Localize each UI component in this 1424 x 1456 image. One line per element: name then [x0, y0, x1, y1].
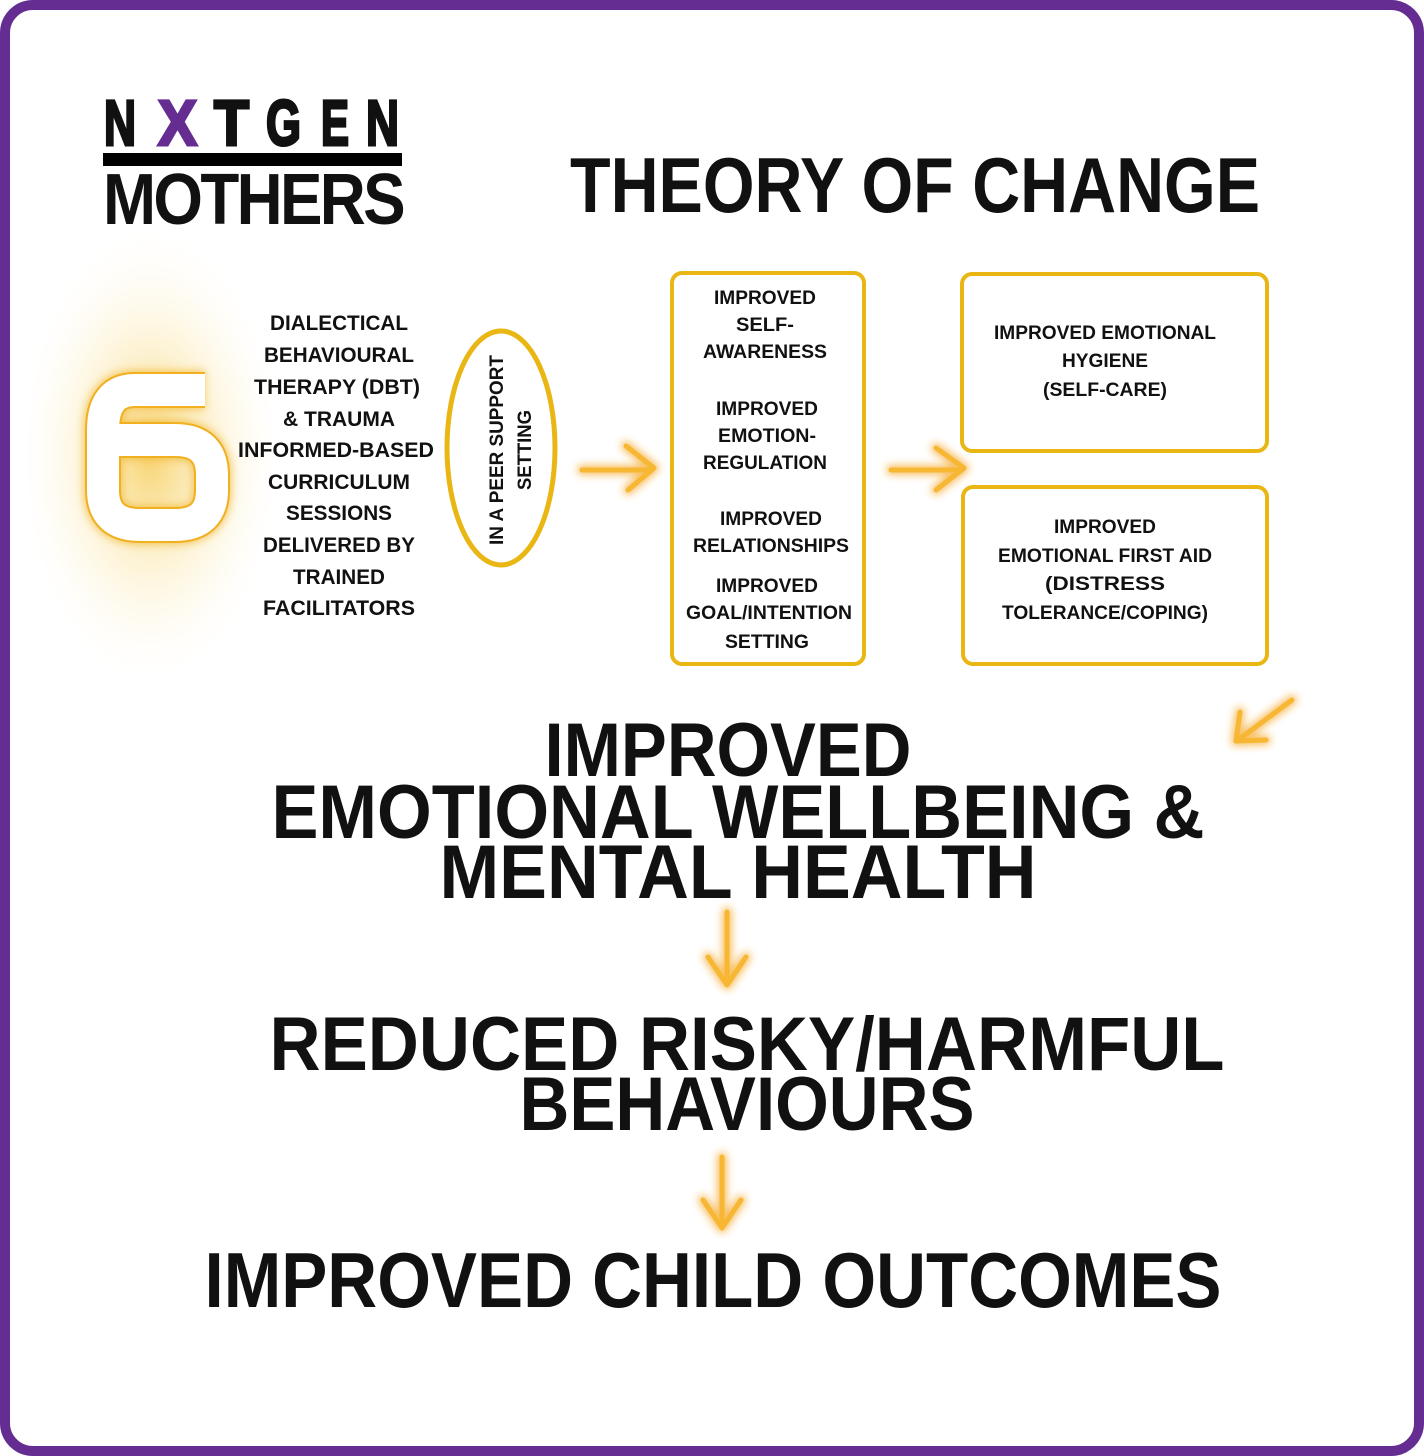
- heading: improved emotional wellbeing: EMOTIONAL WELLBEING &: [272, 770, 1204, 855]
- icon: glowing number 6: [20, 230, 280, 680]
- box: emotional first aid: EMOTIONAL FIRST AID: [998, 546, 1212, 567]
- ellipse: peer support setting: [447, 331, 555, 565]
- arrow: down 1: [708, 912, 746, 985]
- text block: intervention description: & TRAUMA: [283, 408, 395, 431]
- ellipse: peer support setting: IN A PEER SUPPORT: [487, 355, 508, 545]
- text block: intervention description: BEHAVIOURAL: [264, 344, 414, 367]
- ellipse: peer support setting: SETTING: [515, 410, 536, 490]
- box: short-term outcomes: [672, 273, 864, 664]
- box: emotional first aid: (DISTRESS: [1045, 574, 1165, 595]
- box: emotional first aid: IMPROVED: [1054, 517, 1156, 538]
- arrow: right 2: [891, 448, 964, 490]
- heading: improved emotional wellbeing: IMPROVED: [544, 708, 912, 793]
- arrow: diagonal down-left: [1236, 700, 1292, 741]
- logo: N: [366, 87, 399, 159]
- logo: T: [214, 87, 249, 159]
- heading: improved emotional wellbeing: MENTAL HEALTH: [440, 830, 1036, 915]
- box: emotional hygiene: [962, 274, 1267, 451]
- box: emotional hygiene: IMPROVED EMOTIONAL: [994, 323, 1216, 344]
- box: short-term outcomes: IMPROVED: [714, 288, 816, 309]
- text block: intervention description: DELIVERED BY: [263, 534, 415, 557]
- box: emotional first aid: [963, 487, 1267, 664]
- box: short-term outcomes: SETTING: [725, 632, 809, 653]
- heading: improved emotional wellbeing: [272, 708, 1204, 915]
- box: short-term outcomes: IMPROVED: [716, 399, 818, 420]
- logo: X: [158, 87, 197, 159]
- logo: N: [104, 87, 136, 159]
- box: emotional hygiene: (SELF-CARE): [1043, 380, 1167, 401]
- logo: [103, 87, 404, 240]
- box: short-term outcomes: GOAL/INTENTION: [686, 603, 852, 624]
- box: short-term outcomes: REGULATION: [703, 453, 827, 474]
- title: THEORY OF CHANGE: [570, 141, 1260, 229]
- arrow: right 1: [582, 446, 654, 490]
- text block: intervention description: CURRICULUM: [268, 471, 410, 494]
- logo: E: [321, 87, 349, 159]
- box: short-term outcomes: SELF-: [736, 315, 794, 336]
- text block: intervention description: TRAINED: [293, 566, 385, 589]
- arrow: down 2: [703, 1157, 741, 1228]
- heading: reduced risky behaviours: [270, 1002, 1224, 1147]
- text block: intervention description: FACILITATORS: [263, 597, 415, 620]
- text block: intervention description: SESSIONS: [286, 502, 392, 525]
- heading: reduced risky behaviours: REDUCED RISKY/HARMFUL: [270, 1002, 1224, 1087]
- box: emotional hygiene: HYGIENE: [1062, 351, 1148, 372]
- text block: intervention description: THERAPY (DBT): [254, 376, 420, 399]
- logo: MOTHERS: [103, 160, 404, 240]
- box: short-term outcomes: RELATIONSHIPS: [693, 536, 849, 557]
- box: short-term outcomes: IMPROVED: [720, 509, 822, 530]
- text block: intervention description: DIALECTICAL: [270, 312, 408, 335]
- box: short-term outcomes: AWARENESS: [703, 342, 827, 363]
- heading: reduced risky behaviours: BEHAVIOURS: [520, 1062, 974, 1147]
- heading: improved child outcomes: IMPROVED CHILD OUTCOMES: [204, 1236, 1222, 1324]
- text block: intervention description: INFORMED-BASED: [238, 439, 434, 462]
- logo: G: [266, 87, 301, 159]
- box: short-term outcomes: EMOTION-: [718, 426, 816, 447]
- text block: intervention description: [238, 312, 434, 620]
- box: emotional first aid: TOLERANCE/COPING): [1002, 603, 1208, 624]
- box: short-term outcomes: IMPROVED: [716, 576, 818, 597]
